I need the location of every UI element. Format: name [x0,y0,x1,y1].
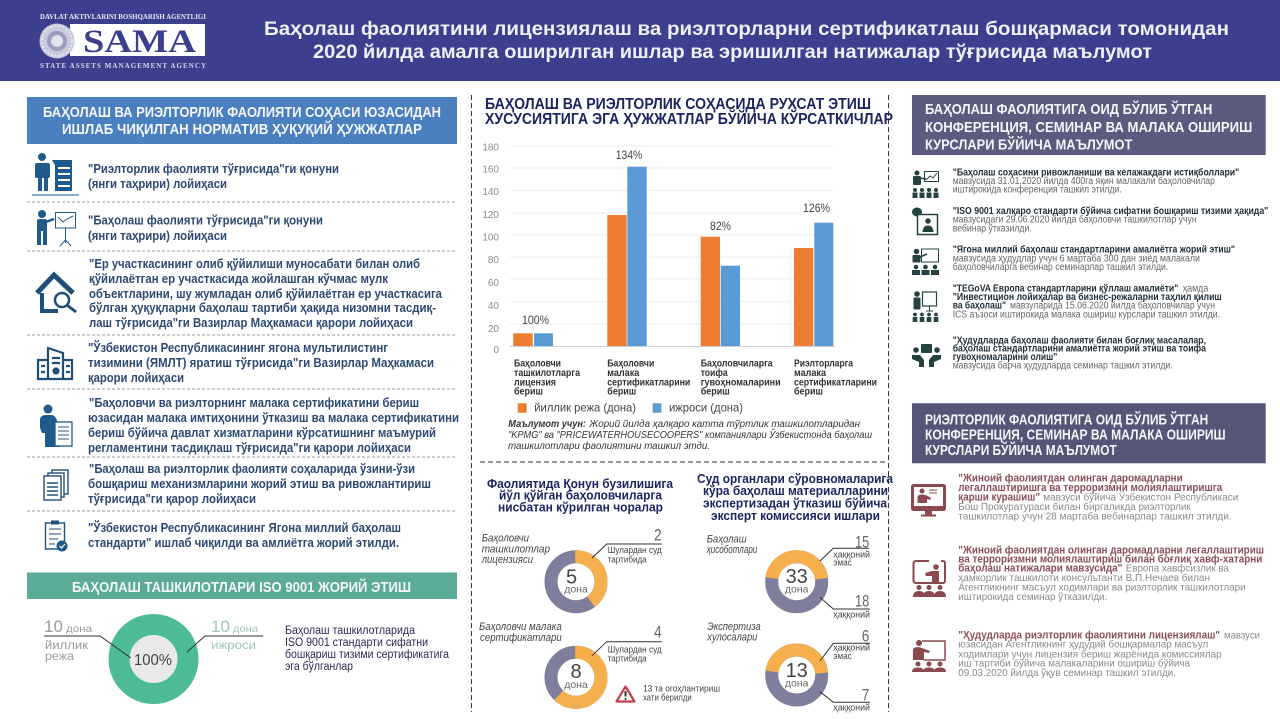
percentage labels: 100% [522,313,549,327]
text: AML webinars item: мавзуси бўйича Ўзбекистон Республикаси [1043,490,1238,503]
donut chart: certificates 8: сертификатлари [480,632,562,644]
heading: permit documents: БАҲОЛАШ ВА РИЭЛТОРЛИК СОҲАСИДА РУХСАТ ЭТИШ [485,96,871,113]
text: certification regulation: бериш бўйича давлат хизматларини кўрсатишнинг маъмурий [88,425,436,440]
category labels: лицензия [514,377,556,388]
icon: webinar screen [912,208,938,234]
heading: expert commission: кўра баҳолаш материалларини [703,483,888,498]
text: regional seminar item: баҳолаш стандартларини амалиётга жорий этиш ва тоифа [953,343,1206,355]
category labels: гувоҳномаларини [701,377,781,388]
heading: expert commission: экспертизадан ўтказиш бўйича [703,496,888,510]
icon: city buildings [38,348,72,379]
heading: valuation conferences: КУРСЛАРИ БЎЙИЧА МАЪЛУМОТ [925,135,1132,153]
text: licensing seminar item: 09.03.2020 йилда ўқув семинар ташкил этилди. [958,667,1176,679]
donut chart: licences 5: 5 [566,566,577,588]
text: certification regulation: юзасидан малака имтиҳонини ўтказиш ва малака сертификатини [88,410,459,425]
donut chart: reports 33: ҳисоботлари [706,544,757,556]
text: warning letters: хати берилди [643,693,692,704]
heading: expert commission [697,471,894,523]
icon: presenter with chart board [37,210,76,246]
text: AML webinars item [958,473,1238,522]
donut chart: certificates 8: 8 [570,661,582,683]
callout: execution: ижроси [211,638,256,652]
donut chart: conclusions 13: Экспертиза [707,621,761,633]
bars [513,167,833,346]
text: self-regulation decision: "Баҳолаш ва риэлторлик фаолияти соҳаларида ўзини-ўзи [89,461,415,476]
text: national standard [88,520,401,550]
text: land plot resolution: "Ер участкасининг олиб қўйилиши муносабати билан олиб [89,256,420,271]
donut chart: licences 5 [481,526,662,607]
text: ISO description: бошқариш тизими сертификатига [285,649,450,661]
text: conference item: иштирокида конференция ташкил этилди. [953,183,1122,195]
y axis labels: 140 [482,187,499,198]
text: reference note [508,418,872,452]
percentage labels [522,148,830,327]
text: land plot resolution: қўйилаётган ер участкасида жойлашган кўчмас мулк [89,271,388,286]
heading: ISO 9001 [27,572,457,599]
y axis labels: 160 [482,164,499,176]
text: warning letters: 13 та огоҳлантириш [643,684,720,695]
text: standards webinar item: "Ягона миллий баҳолаш стандартларини амалиётга жорий этиш" [953,244,1235,256]
heading: measures [487,476,674,515]
donut chart: reports 33: Баҳолаш [707,533,747,545]
callout: execution: 10 [211,617,230,636]
y axis labels [482,142,499,356]
header banner [0,0,1280,81]
heading: ISO 9001: БАҲОЛАШ ТАШКИЛОТЛАРИ ISO 9001 ЖОРИЙ ЭТИШ [72,578,411,596]
donut chart: certificates 8 [479,621,662,702]
text: licensing seminar item: иш тартиби бўйича малакаларини ошириш бўйича [958,658,1190,670]
category labels: Баҳоловчи [514,359,561,370]
icon: training audience [912,640,946,672]
panel: valuation conferences [912,95,1269,371]
callout: annual plan: 10 [44,617,63,636]
text: regional seminar item [953,334,1206,371]
heading: realtor conferences [912,403,1266,463]
text: webinar item: вебинар ўтказилди. [953,222,1032,234]
heading: valuation conferences [912,95,1266,155]
donut chart: conclusions 13: хулосалари [706,632,757,644]
category labels [514,359,877,398]
text: TEGoVA item: "TEGoVA Европа стандартларини қўллаш амалиёти" [953,283,1179,295]
y axis labels: 100 [482,232,499,244]
percentage labels: 82% [710,219,731,233]
donut chart: licences 5: Шулардан суд [608,545,662,556]
heading: measures: Фаолиятида Қонун бузилишига [487,476,674,491]
text: land plot resolution: бўлган ҳуқуқларни баҳолаш тартиби ҳақида низомни тасдиқ- [89,300,436,315]
text: TEGoVA item: ҳамда [1183,284,1209,295]
agency logo: DAVLAT AKTIVLARINI BOSHQARISH AGENTLIGI [40,12,206,21]
text: regional seminar item: мавзусида барча ҳудудларда семинар ташкил этилди. [953,359,1173,371]
heading: measures: нисбатан кўрилган чоралар [498,500,663,515]
category labels: Риэлторларга [794,359,853,370]
callout: annual plan: йиллик [45,638,89,652]
category labels: Баҳоловчиларга [701,359,773,370]
text: realtor law: "Риэлторлик фаолияти тўғрисида"ги қонуни [88,161,339,176]
y axis labels: 40 [488,301,499,312]
donut chart: conclusions 13: 13 [786,660,808,682]
text: regional seminar item: "Ҳудудларда баҳолаш фаолияти билан боғлиқ масалалар, [953,334,1206,346]
panel: normative documents [27,97,459,552]
legend: ижроси (дона) [669,401,743,415]
icon: person with document list [32,153,79,196]
category labels: бериш [514,386,543,398]
text: valuation law: "Баҳолаш фаолияти тўғрисида"ги қонуни [88,212,323,228]
text: multilisting system: қарори лойиҳаси [88,370,184,385]
donut chart: licences 5: 2 [654,526,662,545]
icon: warning triangle [616,686,634,702]
text: national standard: стандарти" ишлаб чиқилди ва амлиётга жорий этилди. [88,535,399,550]
category labels: бериш [607,386,636,398]
text: licensing seminar item: мавзуси [1224,629,1260,641]
y axis labels: 120 [482,210,499,221]
text: national standard: "Ўзбекистон Республикасининг Ягона миллий баҳолаш [88,520,401,535]
legend [518,401,743,415]
category labels: сертификатларини [607,376,690,388]
main title [264,19,1229,63]
icon: monitor webinar [911,484,946,516]
text: reference note: ташкилотлари фаолиятини ташкил этди. [508,440,710,452]
donut chart: conclusions 13: дона [785,678,809,690]
callout: annual plan [44,617,131,663]
text: regional seminar item: гувоҳномаларини олиш" [953,352,1058,363]
donut chart: conclusions 13: 6 [862,627,869,646]
text: certification regulation [88,395,459,455]
text: certification regulation: регламентини тасдиқлаш тўғрисида"ги қарори лойиҳаси [88,440,411,455]
text: reference note: Маълумот учун: [508,418,586,430]
heading: normative documents: БАҲОЛАШ ВА РИЭЛТОРЛИК ФАОЛИЯТИ СОҲАСИ ЮЗАСИДАН [43,104,441,121]
category labels: Баҳоловчи [607,359,654,370]
donut chart: conclusions 13: ҳаққоний [833,703,870,714]
donut chart: 100%: 100% [134,652,172,669]
text: TEGoVA item [953,283,1222,320]
agency logo: STATE ASSETS MANAGEMENT AGENCY [40,62,206,70]
donut chart: reports 33: ҳаққоний [833,550,870,561]
text: valuation law [88,212,323,243]
text: self-regulation decision: тўғрисида"ги қарор лойиҳаси [88,491,256,506]
agency logo: SAMA [83,24,196,60]
percentage labels: 134% [616,148,643,162]
text: TEGoVA item: ва баҳолаш" [953,299,1006,311]
text: land plot resolution: объектларини, шу жумладан олиб қўйилаётган ер участкасига [89,286,443,301]
text: land plot resolution [89,256,443,330]
text: risk seminar item: ҳамкорлик ташкилоти консультанти В.П.Нечаев билан [958,572,1210,584]
panel: permit documents chart [482,96,893,452]
text: conference item [953,166,1240,195]
text: realtor law [88,161,339,191]
category labels: малака [607,368,640,379]
text: reference note: Жорий йилда ҳалқаро катта тўртлик ташкилотларидан [588,418,860,430]
donut chart: conclusions 13 [706,621,870,714]
text: ISO description: Баҳолаш ташкилотларида [285,625,416,637]
panel: ISO 9001 [27,572,457,694]
donut chart: reports 33: ҳаққоний [833,609,870,620]
text: risk seminar item: Европа хавфсизлик ва [1126,563,1229,575]
text: conference item: "Баҳолаш соҳасини ривожланиши ва келажакдаги истиқболлари" [953,166,1240,178]
callout: execution [187,617,263,652]
icon: clipboard with check [46,520,68,552]
text: self-regulation decision [88,461,431,506]
text: standards webinar item: мавзусида ҳудудлар учун 6 мартаба 300 дан зиёд малакали [953,252,1200,264]
main title: 2020 йилда амалга оширилган ишлар ва эришилган натижалар тўғрисида маълумот [313,42,1152,63]
donut chart: certificates 8: Баҳоловчи малака [479,621,562,633]
heading: expert commission: эксперт комиссияси ишлари [711,508,880,523]
donut chart: reports 33: 18 [855,592,869,611]
icon: house with magnifier [37,275,76,312]
donut chart: reports 33: 33 [786,566,808,588]
text: AML webinars item: ташкилотлар учун 28 мартаба вебинарлар ташкил этилди. [958,510,1232,522]
text: licensing seminar item: "Ҳудудларда риэлторлик фаолиятини лицензиялаш" [958,629,1220,641]
text: ISO description: ISO 9001 стандарти сифатни [285,637,428,649]
donut chart: 100% [119,624,188,694]
category labels: сертификатларини [794,376,877,388]
donut chart: certificates 8: 4 [654,623,662,642]
text: licensing seminar item: ходимлари учун лицензия бериш жарёнида комиссиялар [958,648,1222,660]
category labels: бериш [794,386,823,398]
icon: stacked documents [44,470,68,500]
donut chart: reports 33: эмас [833,558,852,569]
panel: measures against valuers [479,476,720,704]
text: valuation law: (янги таҳрири) лойиҳаси [88,228,227,243]
callout: annual plan: дона [66,623,92,635]
heading: normative documents: ИШЛАБ ЧИҚИЛГАН НОРМАТИВ ҲУҚУҚИЙ ҲУЖЖАТЛАР [62,120,422,138]
heading: measures: йўл қўйган баҳоловчиларга [499,488,663,502]
callout: execution: дона [233,623,258,635]
bar chart [482,142,877,398]
category labels: тоифа [701,367,728,379]
text: TEGoVA item: ICS аъзоси иштирокида малака ошириш курслари ташкил этилди. [953,309,1220,320]
donut chart: licences 5: лицензияси [481,554,533,566]
text: risk seminar item [958,544,1264,603]
icon: seminar audience [912,249,939,275]
main title: Баҳолаш фаолиятини лицензиялаш ва риэлторларни сертификатлаш бошқармаси томонидан [264,19,1229,40]
text: reference note: "KPMG" ва "PRICEWATERHOUSECOOPERS" компаниялари Ўзбекистонда баҳолаш [508,428,872,441]
text: self-regulation decision: бошқариш механизмларини жорий этиш ва ривожлантириш [88,476,431,491]
donut chart: reports 33: 15 [855,532,869,551]
heading: valuation conferences: БАҲОЛАШ ФАОЛИЯТИГА ОИД БЎЛИБ ЎТГАН [925,100,1212,118]
category labels: ташкилотларга [514,368,580,379]
donut chart: certificates 8: Шулардан суд [608,645,662,656]
text: conference item: мавзусида 31.01.2020 йилда 400га яқин малакали баҳоловчилар [953,175,1215,187]
y axis labels: 60 [488,278,499,289]
category labels: бериш [701,386,730,398]
heading: normative documents [27,97,457,144]
y axis labels: 180 [482,142,499,154]
donut chart: licences 5: Баҳоловчи [482,533,529,545]
callout: annual plan: режа [45,649,74,663]
text: risk seminar item: баҳолаш натижалари мавзусида" [958,563,1122,575]
y axis labels: 80 [488,255,499,266]
icon: conference presenter [912,170,938,198]
text: land plot resolution: лаш тўғрисида"ги Вазирлар Маҳкамаси қарори лойиҳаси [89,315,413,330]
y axis labels: 20 [488,324,499,335]
donut chart: licences 5: ташкилотлар [482,544,550,556]
percentage labels: 126% [803,201,830,215]
donut chart: conclusions 13: эмас [833,651,852,662]
icon: course presenter [913,291,938,322]
legend: йиллик режа (дона) [534,401,636,415]
icon: person with certificate [40,404,72,447]
heading: realtor conferences: КУРСЛАРИ БЎЙИЧА МАЪЛУМОТ [925,441,1117,459]
donut chart: licences 5: дона [564,584,588,596]
agency logo [40,12,206,70]
text: AML webinars item: Бош Прокуратураси билан биргаликда риэлторлик [958,501,1191,513]
text: multilisting system: "Ўзбекистон Республикасининг ягона мультилистинг [88,340,389,355]
text: licensing seminar item [958,629,1260,679]
icon: seminar board [913,561,946,597]
text: ISO description [285,625,450,673]
text: ISO description: эга бўлганлар [285,661,353,673]
panel: realtor conferences [911,403,1266,679]
text: webinar item: мавзусидаги 29.06.2020 йилда баҳоловчи ташкилотлар учун [953,214,1197,226]
donut chart: licences 5: тартибида [608,555,647,566]
donut chart: reports 33: дона [785,584,809,596]
text: warning letters [643,684,720,704]
heading: realtor conferences: РИЭЛТОРЛИК ФАОЛИЯТИГА ОИД БЎЛИБ ЎТГАН [925,410,1208,428]
text: TEGoVA item: "Инвестицион лойиҳалар ва бизнес-режаларни таҳлил қилиш [953,291,1222,303]
text: TEGoVA item: мавзуларида 15.06.2020 йилда баҳоловчилар учун [1010,299,1215,311]
panel: expert commission [697,471,894,714]
text: risk seminar item: Агентликнинг масъул ходимлари ва риэлторлик ташкилотлари [958,582,1246,594]
donut chart: certificates 8: тартибида [608,653,647,664]
icon: regional meeting [912,344,941,367]
text: licensing seminar item: юзасидан Агентликнинг ҳудудий бошқармалар масъул [958,639,1208,651]
text: multilisting system [88,340,434,385]
donut chart: reports 33 [706,532,870,620]
text: risk seminar item: иштирокида семинар ўтказилди. [958,591,1107,603]
category labels: малака [794,368,826,379]
text: webinar item [953,205,1269,234]
text: AML webinars item: легаллаштиришга ва терроризмни молиялаштиришга [958,482,1223,494]
text: standards webinar item [953,244,1235,273]
text: certification regulation: "Баҳоловчи ва риэлторнинг малака сертификатини бериш [89,395,419,410]
heading: permit documents [485,96,893,128]
text: realtor law: (янги таҳрири) лойиҳаси [88,176,227,191]
heading: permit documents: ХУСУСИЯТИГА ЭГА ҲУЖЖАТЛАР БЎЙИЧА КЎРСАТКИЧЛАР [485,110,893,128]
donut chart: conclusions 13: ҳаққоний [833,643,870,654]
text: standards webinar item: баҳоловчиларга вебинар семинарлар ташкил этилди. [953,261,1168,273]
donut chart: certificates 8: дона [564,679,588,691]
text: AML webinars item: "Жиноий фаолиятдан олинган даромадларни [958,473,1183,485]
text: multilisting system: тизимини (ЯМЛТ) яратиш тўғрисида"ги Вазирлар Маҳкамаси [88,355,434,370]
donut chart: conclusions 13: 7 [862,686,869,705]
text: AML webinars item: қарши курашиш" [958,491,1040,503]
y axis labels: 0 [493,345,499,356]
heading: expert commission: Суд органлари сўровномаларига [697,471,894,486]
